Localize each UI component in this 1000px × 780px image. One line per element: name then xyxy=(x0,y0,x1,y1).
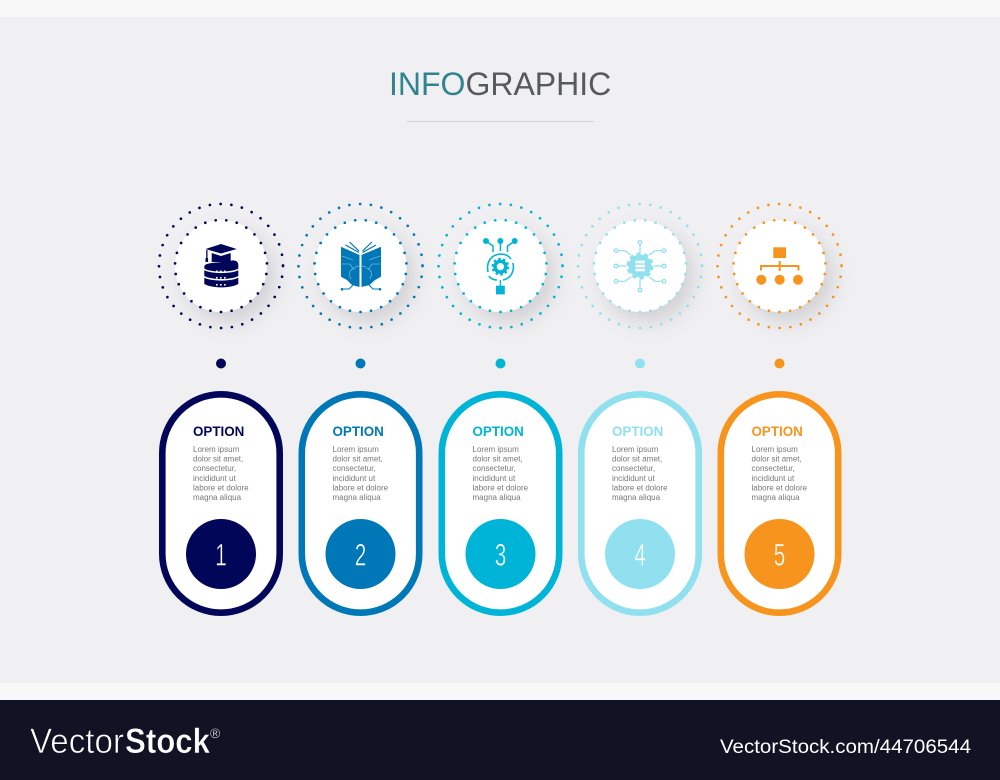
number badge xyxy=(466,519,536,589)
connector dot 3 xyxy=(496,358,506,368)
number badge xyxy=(744,519,814,589)
body text: magna aliqua xyxy=(612,493,661,502)
body text: consectetur, xyxy=(752,464,795,473)
body text: incididunt ut xyxy=(332,474,376,483)
heading: OPTION xyxy=(752,424,803,439)
body text: Lorem ipsum xyxy=(472,445,519,454)
body text: magna aliqua xyxy=(193,493,242,502)
icon: organisation chart xyxy=(756,247,803,285)
body text: consectetur, xyxy=(612,464,655,473)
icon circle 2 xyxy=(298,204,422,328)
body text: Lorem ipsum xyxy=(193,445,240,454)
body text: magna aliqua xyxy=(472,493,521,502)
number badge xyxy=(186,519,256,589)
body text: consectetur, xyxy=(472,464,516,473)
option card 2 xyxy=(302,394,419,613)
footer logo xyxy=(30,722,221,761)
footer logo: Vector xyxy=(30,722,124,761)
body text: dolor sit amet, xyxy=(193,455,243,464)
number badge: 5 xyxy=(774,537,785,572)
icon circle 1 xyxy=(159,204,283,328)
body text: magna aliqua xyxy=(752,493,800,502)
option card 4 xyxy=(581,394,699,613)
number badge xyxy=(326,519,396,589)
body text: incididunt ut xyxy=(472,474,516,483)
number badge: 2 xyxy=(355,537,366,572)
heading: OPTION xyxy=(612,424,663,439)
body text: incididunt ut xyxy=(612,474,655,483)
body text: dolor sit amet, xyxy=(332,455,383,464)
body text: labore et dolore xyxy=(193,483,249,492)
body text: labore et dolore xyxy=(472,483,529,492)
body text: dolor sit amet, xyxy=(612,455,662,464)
number badge: 1 xyxy=(215,537,227,572)
icon circle 5 xyxy=(718,204,842,328)
body text: incididunt ut xyxy=(752,474,795,483)
footer bar xyxy=(0,700,1000,780)
footer logo: ® xyxy=(210,725,221,741)
option card 5 xyxy=(721,394,838,613)
body text: Lorem ipsum xyxy=(332,445,379,454)
connector dot 1 xyxy=(216,358,226,368)
heading: OPTION xyxy=(193,424,244,439)
number badge xyxy=(605,519,675,589)
body text: Lorem ipsum xyxy=(752,445,798,454)
connector dot 4 xyxy=(635,358,645,368)
icon: book with brain xyxy=(341,242,381,291)
body text: consectetur, xyxy=(193,464,236,473)
connector dot 2 xyxy=(356,358,366,368)
icon circle 4 xyxy=(578,204,702,328)
body text: labore et dolore xyxy=(332,483,389,492)
footer image id: VectorStock.com/44706544 xyxy=(720,737,971,758)
body text: dolor sit amet, xyxy=(472,455,523,464)
body text: consectetur, xyxy=(332,464,376,473)
number badge: 4 xyxy=(634,537,646,572)
footer logo: Stock xyxy=(125,722,210,761)
connector dot 5 xyxy=(774,358,784,368)
option card 3 xyxy=(442,394,559,613)
title: INFOGRAPHIC xyxy=(389,66,611,102)
heading: OPTION xyxy=(332,424,384,439)
body text: dolor sit amet, xyxy=(752,455,802,464)
icon: gear with circuit nodes xyxy=(614,240,666,292)
number badge: 3 xyxy=(495,537,506,572)
body text: Lorem ipsum xyxy=(612,445,659,454)
option card 1 xyxy=(162,394,280,613)
icon circle 3 xyxy=(438,204,562,328)
body text: incididunt ut xyxy=(193,474,236,483)
heading: OPTION xyxy=(472,424,524,439)
body text: labore et dolore xyxy=(612,483,668,492)
body text: labore et dolore xyxy=(752,483,808,492)
icon: graduation cap on database xyxy=(204,244,238,287)
body text: magna aliqua xyxy=(332,493,381,502)
icon: gear with process nodes xyxy=(483,238,518,294)
